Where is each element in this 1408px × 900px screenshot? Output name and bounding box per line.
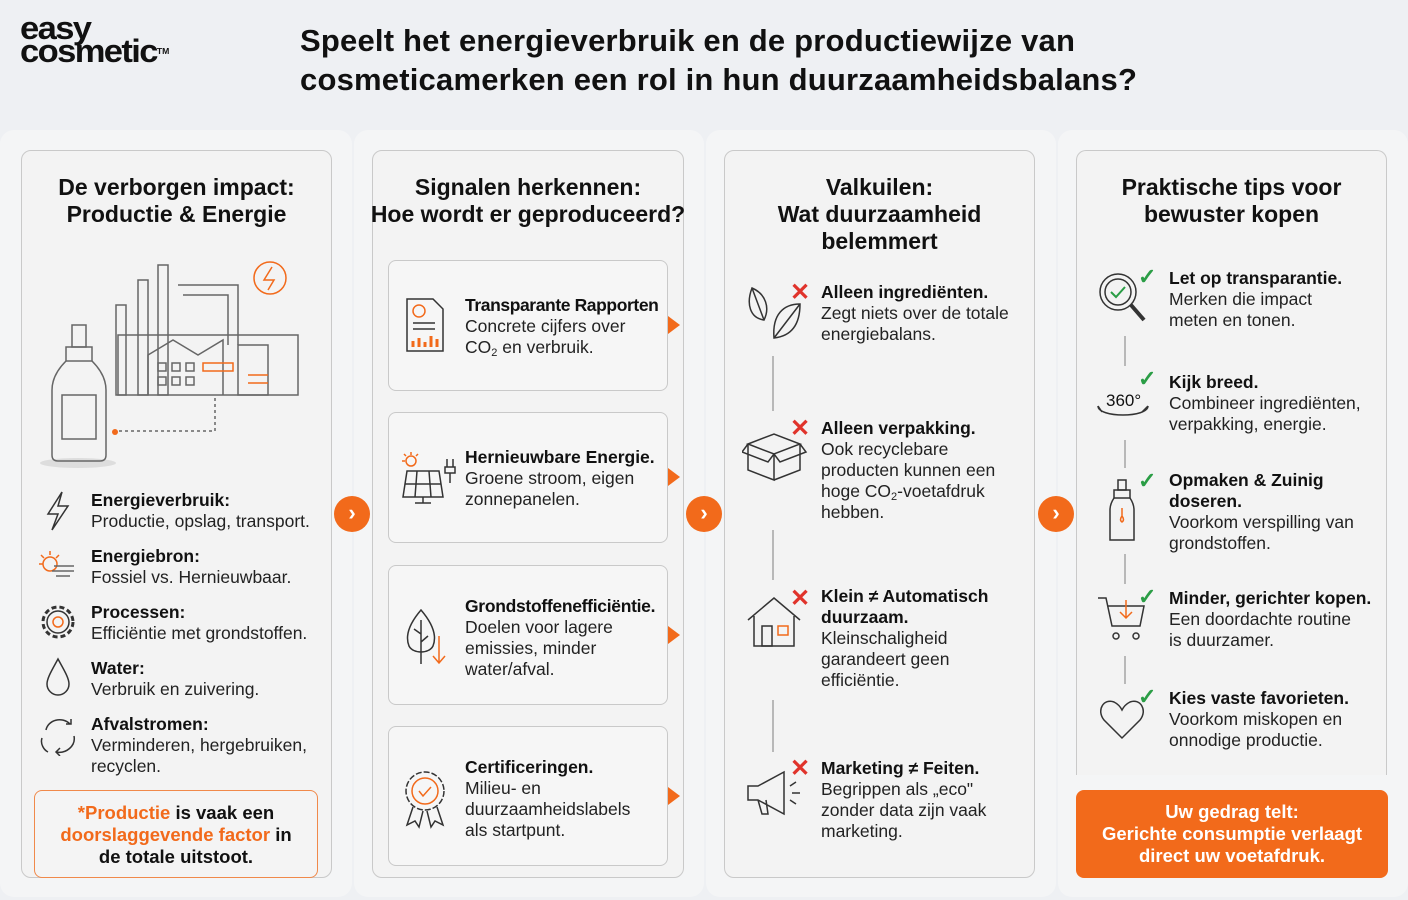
title [300, 23, 1137, 97]
pitfall: ingredienten [748, 279, 1009, 344]
tip: doseren: doseren. [1169, 491, 1242, 511]
heading 3 [778, 174, 981, 254]
pitfall: ingredienten: Alleen ingrediënten. [821, 282, 988, 302]
callout: productie: *Productie is vaak een doorslaggevende factor in de totale uitstoot. [60, 802, 292, 867]
pitfall: klein: Klein ≠ Automatisch [821, 586, 988, 606]
callout: uw gedrag telt: direct uw voetafdruk. [1139, 845, 1325, 866]
panel: verborgen impact [21, 150, 332, 878]
icon: gear [42, 606, 74, 638]
tip: doseren: grondstoffen. [1169, 533, 1271, 553]
card: grondstoffen: Doelen voor lagere [465, 617, 613, 637]
tip: kijk breed: verpakking, energie. [1169, 414, 1327, 434]
card: certificeringen [388, 726, 668, 866]
panel: valkuilen [724, 150, 1035, 878]
card: hernieuwbare energie: Groene stroom, eigen [465, 468, 634, 488]
card: hernieuwbare energie: zonnepanelen. [465, 489, 580, 509]
heading 1: Productie & Energie [67, 201, 286, 227]
list: impact factors: Efficiëntie met grondstoffen. [91, 623, 307, 643]
arrow 3: › [1052, 500, 1060, 525]
arrow 2: › [700, 500, 708, 525]
icon: lightning [46, 492, 70, 530]
tip: transparantie: Let op transparantie. [1169, 268, 1342, 288]
tip: minder kopen: Een doordachte routine [1169, 609, 1351, 629]
list: impact factors [39, 490, 310, 776]
heading 1 [58, 174, 295, 227]
heading 3: Valkuilen: [826, 174, 933, 200]
tip: transparantie [1099, 264, 1342, 330]
tip: favorieten [1100, 684, 1349, 750]
tip: minder kopen: Minder, gerichter kopen. [1169, 588, 1371, 608]
illustration: bottle and factory [40, 261, 299, 468]
heading 1: De verborgen impact: [58, 174, 295, 200]
pitfall: marketing: Begrippen als „eco" [821, 779, 973, 799]
tip: favorieten: Kies vaste favorieten. [1169, 688, 1349, 708]
pitfall: verpakking [742, 415, 995, 522]
card: certificeringen: duurzaamheidslabels [465, 799, 630, 819]
logo: cosmeticTM [20, 33, 169, 69]
arrow 3 [1038, 496, 1074, 532]
callout: uw gedrag telt [1076, 790, 1388, 878]
tip: doseren: ✓ [1138, 468, 1156, 493]
pitfall: ingredienten: energiebalans. [821, 324, 936, 344]
card: certificeringen: Certificeringen. [465, 757, 593, 777]
pitfall: klein: ✕ [790, 585, 810, 612]
pitfall: marketing: zonder data zijn vaak [821, 800, 986, 820]
pitfall: klein: duurzaam. [821, 607, 909, 627]
card: rapporten: Concrete cijfers over [465, 316, 625, 336]
tip: kijk breed: 360° [1106, 391, 1141, 410]
pitfall: verpakking: Ook recyclebare [821, 439, 948, 459]
pitfall: marketing: ✕ [790, 755, 810, 782]
tip: favorieten: ✓ [1138, 684, 1156, 709]
tip: doseren [1109, 468, 1354, 553]
card: rapporten: Transparante Rapporten [465, 295, 658, 315]
card: certificeringen: als startpunt. [465, 820, 565, 840]
icon: water drop [46, 658, 70, 696]
card: grondstoffen: water/afval. [465, 659, 554, 679]
tip: favorieten: Voorkom miskopen en [1169, 709, 1342, 729]
pitfall: ingredienten: Zegt niets over de totale [821, 303, 1009, 323]
callout: uw gedrag telt: Uw gedrag telt: [1165, 801, 1299, 822]
list: impact factors: Fossiel vs. Hernieuwbaar. [91, 567, 291, 587]
card: certificeringen: Milieu- en [465, 778, 541, 798]
list: impact factors: Verbruik en zuivering. [91, 679, 259, 699]
card: grondstoffen: Grondstoffenefficiëntie. [465, 596, 655, 616]
pitfall: verpakking: producten kunnen een [821, 460, 995, 480]
list: impact factors: Afvalstromen: [91, 714, 209, 734]
heading 3: belemmert [821, 228, 938, 254]
list: impact factors: Productie, opslag, transport. [91, 511, 310, 531]
callout: uw gedrag telt: Gerichte consumptie verlaagt [1102, 823, 1362, 844]
card: hernieuwbare energie: Hernieuwbare Energie. [465, 447, 655, 467]
tip: doseren: Opmaken & Zuinig [1169, 470, 1324, 490]
list: impact factors: Water: [91, 658, 145, 678]
card: rapporten [388, 260, 668, 391]
pitfall: klein: garandeert geen [821, 649, 949, 669]
tip: transparantie: Merken die impact [1169, 289, 1312, 309]
pitfall: marketing: marketing. [821, 821, 903, 841]
tip: transparantie: meten en tonen. [1169, 310, 1295, 330]
tip: favorieten: onnodige productie. [1169, 730, 1323, 750]
arrow 2 [686, 496, 722, 532]
pitfall: marketing [747, 755, 986, 841]
heading 2: Signalen herkennen: [415, 174, 641, 200]
title: Speelt het energieverbruik en de productiewijze van [300, 23, 1075, 58]
pitfall: klein [748, 585, 988, 690]
list: impact factors: Verminderen, hergebruiken, [91, 735, 307, 755]
icon: sun wind [39, 551, 74, 577]
tip: minder kopen: is duurzamer. [1169, 630, 1274, 650]
tip: kijk breed: Combineer ingrediënten, [1169, 393, 1361, 413]
arrow 1: › [348, 500, 356, 525]
pitfall: verpakking: ✕ [790, 415, 810, 442]
tip: kijk breed [1097, 366, 1361, 434]
tip: minder kopen [1098, 584, 1371, 650]
logo [20, 10, 169, 69]
panel: signalen [372, 150, 684, 878]
icon: recycle [40, 719, 76, 756]
callout: productie [34, 790, 318, 878]
heading 4: Praktische tips voor [1122, 174, 1341, 200]
heading 2 [371, 174, 685, 227]
pitfall: ingredienten: ✕ [790, 279, 810, 306]
pitfall: verpakking: hebben. [821, 502, 884, 522]
card: rapporten: CO2 en verbruik. [465, 337, 594, 359]
heading 4: bewuster kopen [1144, 201, 1319, 227]
heading 4 [1122, 174, 1342, 227]
heading 2: Hoe wordt er geproduceerd? [371, 201, 685, 227]
card: grondstoffen: emissies, minder [465, 638, 596, 658]
list: impact factors: Energieverbruik: [91, 490, 230, 510]
logo: easy [20, 10, 90, 46]
card: hernieuwbare energie [388, 412, 668, 543]
tip: kijk breed: ✓ [1138, 366, 1156, 391]
list: impact factors: Processen: [91, 602, 185, 622]
heading 3: Wat duurzaamheid [778, 201, 981, 227]
title: cosmeticamerken een rol in hun duurzaamheidsbalans? [300, 62, 1137, 97]
list: impact factors: Energiebron: [91, 546, 200, 566]
pitfall: verpakking: hoge CO2-voetafdruk [821, 481, 985, 503]
pitfall: verpakking: Alleen verpakking. [821, 418, 976, 438]
tip: kijk breed: Kijk breed. [1169, 372, 1258, 392]
pitfall: klein: Kleinschaligheid [821, 628, 947, 648]
tip: minder kopen: ✓ [1138, 584, 1156, 609]
pitfall: marketing: Marketing ≠ Feiten. [821, 758, 979, 778]
list: impact factors: recyclen. [91, 756, 161, 776]
card: grondstoffen [388, 565, 668, 705]
panel: tips [1076, 150, 1387, 775]
pitfall: klein: efficiëntie. [821, 670, 899, 690]
arrow 1 [334, 496, 370, 532]
tip: doseren: Voorkom verspilling van [1169, 512, 1354, 532]
tip: transparantie: ✓ [1138, 264, 1156, 289]
